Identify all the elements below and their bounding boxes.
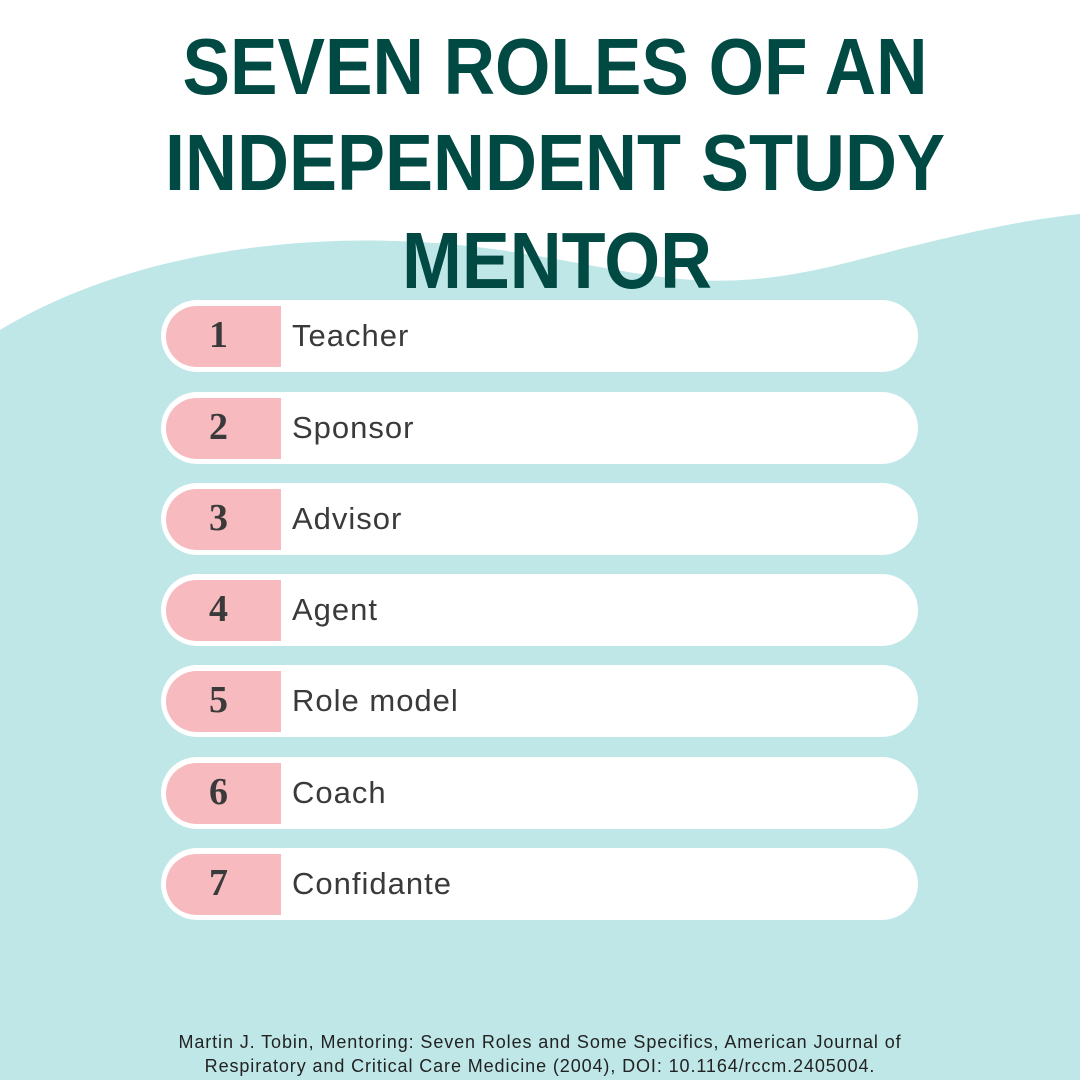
row 7 — [161, 848, 918, 920]
title: SEVEN ROLES OF AN — [182, 22, 928, 111]
title: INDEPENDENT STUDY — [165, 118, 945, 207]
citation: Respiratory and Critical Care Medicine (2004), DOI: 10.1164/rccm.2405004. — [205, 1056, 875, 1076]
row 6: 6 — [209, 771, 228, 813]
citation — [178, 1032, 902, 1076]
row 3: 3 — [209, 497, 228, 539]
row 4 — [161, 574, 918, 646]
row 5 — [161, 665, 918, 737]
title — [165, 22, 945, 300]
row 1 — [161, 300, 918, 372]
row 3 — [161, 483, 918, 555]
row 2: 2 — [209, 406, 228, 448]
citation: Martin J. Tobin, Mentoring: Seven Roles and Some Specifics, American Journal of — [178, 1032, 902, 1052]
row 2 — [161, 392, 918, 464]
row 6 — [161, 757, 918, 829]
row 1: 1 — [209, 314, 228, 356]
row 5: 5 — [209, 679, 228, 721]
row 7: Confidante — [292, 866, 452, 901]
row 1: Teacher — [292, 318, 409, 353]
row 3: Advisor — [292, 501, 402, 536]
row 7: 7 — [209, 862, 228, 904]
row 4: Agent — [292, 592, 378, 627]
row 2: Sponsor — [292, 410, 414, 445]
row 4: 4 — [209, 588, 228, 630]
row 6: Coach — [292, 775, 387, 810]
row 5: Role model — [292, 683, 459, 718]
